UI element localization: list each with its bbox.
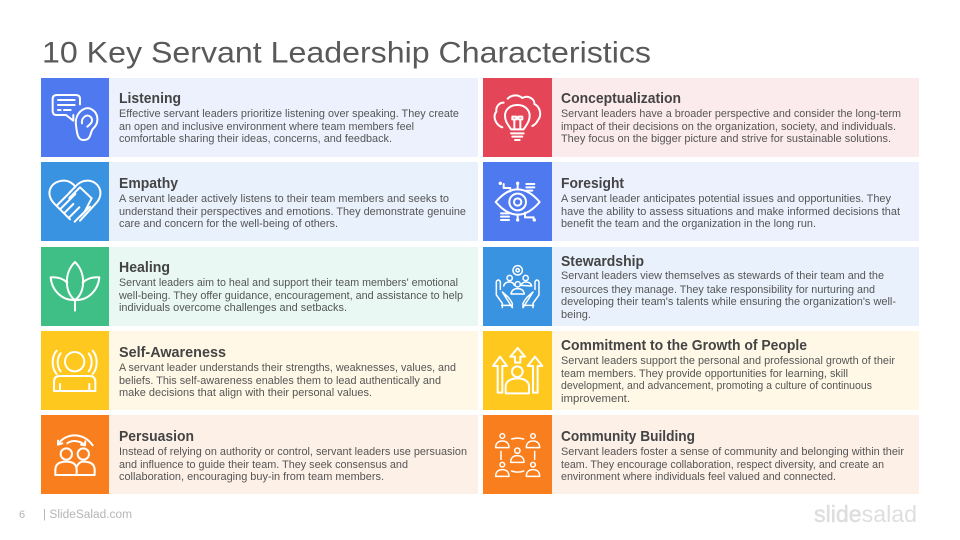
text: community description: Servant leaders foster a sense of community and belonging within their xyxy=(561,446,904,458)
icon: hands holding team and gear xyxy=(496,266,539,308)
text: community description: team. They encourage collaboration, respect diversity, and create an xyxy=(561,459,884,471)
title: 10 Key Servant Leadership Characteristics xyxy=(42,36,651,70)
text: foresight description: benefit the team and the organization in the long run. xyxy=(561,218,816,230)
text: empathy description: A servant leader actively listens to their team members and seeks to xyxy=(119,193,449,205)
text: commitment description: development, and advancement, promoting a culture of continuous xyxy=(561,380,872,392)
heading: stewardship: Stewardship xyxy=(561,253,644,270)
text: healing description: well-being. They offer guidance, encouragement, and assistance to help xyxy=(118,290,463,302)
icon: connected community xyxy=(496,434,540,476)
text: persuasion description: collaboration, encouraging buy-in from team members. xyxy=(119,471,384,483)
text: self-awareness description: beliefs. This self-awareness enables them to lead authentically and xyxy=(119,375,441,387)
heading: listening: Listening xyxy=(119,90,181,107)
text: commitment description xyxy=(561,355,895,405)
text: self-awareness description: A servant leader understands their strengths, weaknesses, values, and xyxy=(119,362,456,374)
icon: speech bubble and ear xyxy=(53,95,97,140)
panel: foresight xyxy=(483,162,919,241)
text: healing description: Servant leaders aim to heal and support their team members' emotional xyxy=(119,277,458,289)
heading: conceptualization: Conceptualization xyxy=(561,90,681,107)
logo: slidesalad: slidesalad xyxy=(814,501,917,527)
icon: two people with arrows xyxy=(55,435,95,475)
text: conceptualization description xyxy=(561,108,901,145)
text: conceptualization description: Servant leaders have a broader perspective and consider the long-term xyxy=(561,108,901,120)
text: stewardship description: resources they manage. They take responsibility for nurturing and xyxy=(561,284,875,296)
icon: digital eye xyxy=(496,182,540,222)
text: commitment description: team members. They provide opportunities for learning, skill xyxy=(561,368,848,380)
text: commitment description: improvement. xyxy=(561,393,630,405)
icon: heart handshake xyxy=(49,181,100,222)
text: persuasion description: Instead of relying on authority or control, servant leaders use persuasion xyxy=(119,446,467,458)
text: stewardship description: Servant leaders view themselves as stewards of their team and the xyxy=(561,270,884,282)
text: foresight description: have the ability to assess situations and make informed decisions that xyxy=(561,206,900,218)
heading: healing: Healing xyxy=(119,259,170,276)
icon: leaves xyxy=(51,262,99,311)
text: persuasion description xyxy=(119,446,467,483)
text: stewardship description: developing their team's talents while ensuring the organization's well- xyxy=(561,296,896,308)
heading: community building: Community Building xyxy=(561,428,695,445)
panel: conceptualization xyxy=(483,78,919,157)
heading: self-awareness: Self-Awareness xyxy=(119,344,226,361)
text: healing description: individuals overcome challenges and setbacks. xyxy=(119,302,347,314)
text: listening description xyxy=(119,108,459,145)
text: foresight description: A servant leader anticipates potential issues and opportunities. They xyxy=(561,193,892,205)
text: empathy description xyxy=(119,193,466,230)
panel: community building xyxy=(483,415,919,494)
text: self-awareness description xyxy=(119,362,456,399)
text: listening description: Effective servant leaders prioritize listening over speaking. They create xyxy=(119,108,459,120)
text: commitment description: Servant leaders support the personal and professional growth of their xyxy=(561,355,895,367)
panel: empathy xyxy=(41,162,478,241)
text: healing description xyxy=(118,277,463,314)
text: empathy description: understand their perspectives and emotions. They demonstrate genuine xyxy=(119,206,466,218)
panel: stewardship xyxy=(483,247,919,326)
text: self-awareness description: make decisions that align with their personal values. xyxy=(119,387,372,399)
text: stewardship description: being. xyxy=(561,309,591,321)
text: stewardship description xyxy=(561,270,896,321)
icon: person with upward arrows xyxy=(493,348,542,393)
heading: persuasion: Persuasion xyxy=(119,428,194,445)
heading: empathy: Empathy xyxy=(119,175,179,192)
panel: commitment to the growth of people xyxy=(483,331,919,410)
page number: 6 xyxy=(19,509,25,521)
text: persuasion description: and influence to guide their team. They seek consensus and xyxy=(119,459,408,471)
text: community description: environment where individuals feel valued and connected. xyxy=(561,471,836,483)
text: conceptualization description: They focus on the bigger picture and strive for sustainable solutions. xyxy=(561,133,891,145)
icon: lightbulb in cloud xyxy=(495,95,540,140)
heading: commitment to the growth of people: Commitment to the Growth of People xyxy=(561,337,807,354)
heading: foresight: Foresight xyxy=(561,175,624,192)
panel: persuasion xyxy=(41,415,478,494)
text: conceptualization description: impact of their decisions on the organization, society, and individuals. xyxy=(561,121,896,133)
panel: self-awareness xyxy=(41,331,478,410)
text: listening description: an open and inclusive environment where team members feel xyxy=(119,121,414,133)
icon: person with aura xyxy=(53,351,97,391)
text: community description xyxy=(561,446,904,483)
text: listening description: comfortable sharing their ideas, concerns, and feedback. xyxy=(119,133,392,145)
text: empathy description: care and concern for the well-being of others. xyxy=(119,218,338,230)
footer source: | SlideSalad.com xyxy=(43,509,132,521)
panel: healing xyxy=(41,247,478,326)
text: foresight description xyxy=(561,193,900,230)
panel: listening xyxy=(41,78,478,157)
